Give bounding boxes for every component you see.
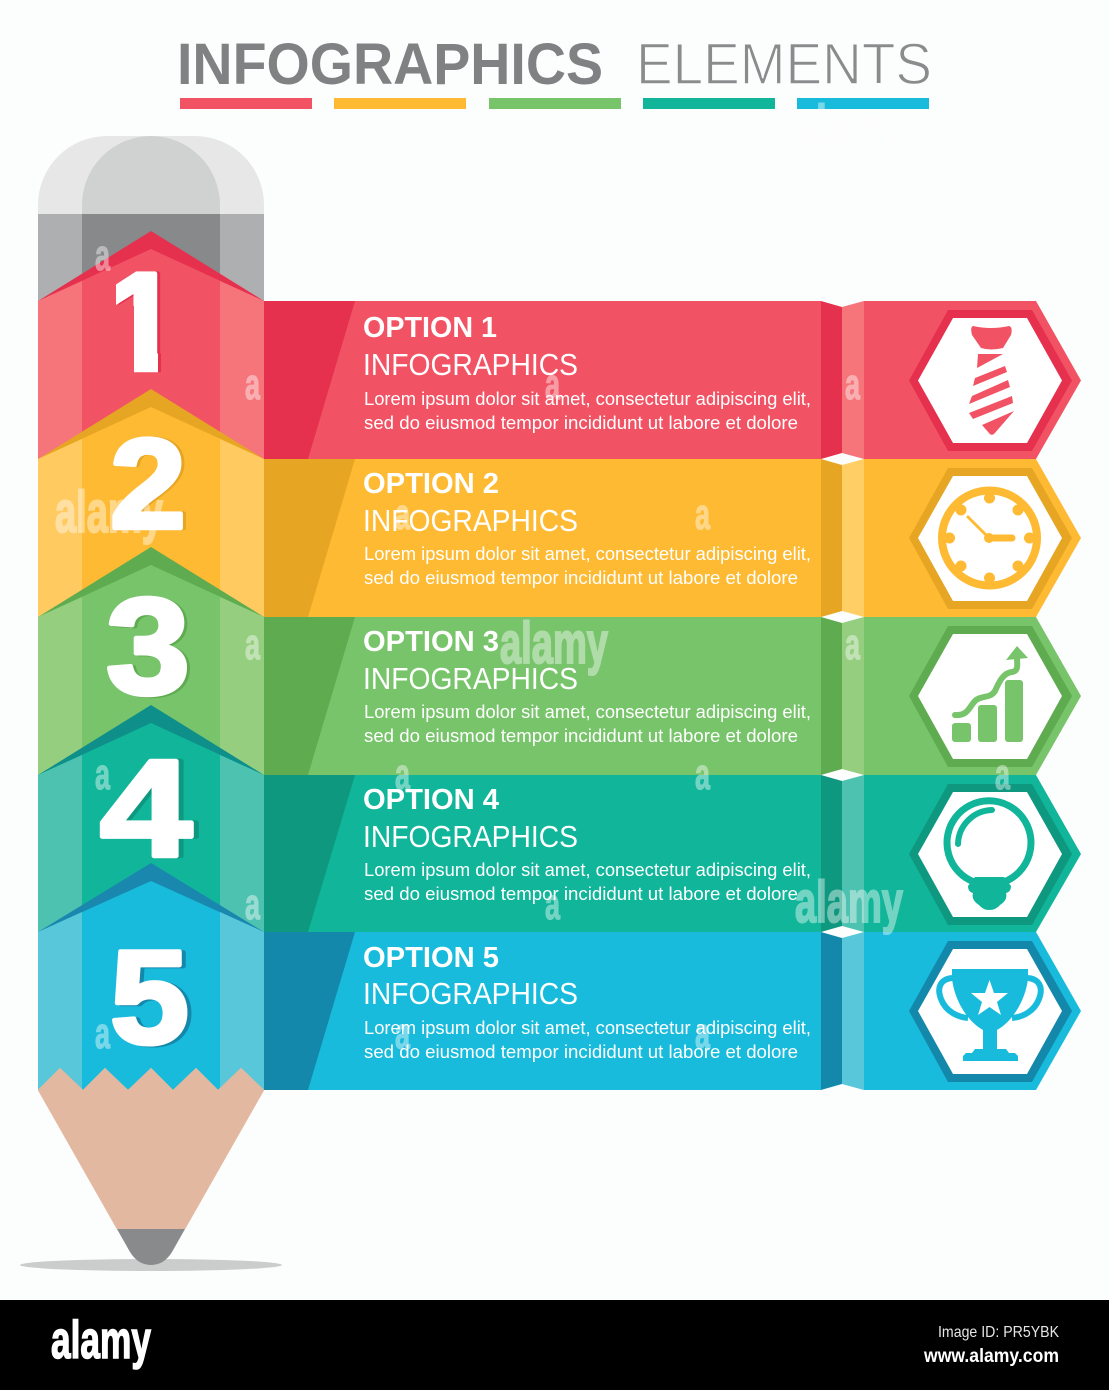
number 1: 1 bbox=[106, 243, 184, 400]
icon: trophy bbox=[939, 969, 1041, 1061]
number 5: 5 bbox=[114, 925, 193, 1073]
number 4: 4 bbox=[105, 732, 197, 886]
pencil section 5 bbox=[38, 863, 264, 1090]
hexagon 1 bbox=[909, 310, 1072, 451]
text: option 5: INFOGRAPHICS bbox=[363, 977, 578, 1011]
watermark: a bbox=[245, 880, 260, 929]
text: option 4: sed do eiusmod tempor incididunt ut labore et dolore bbox=[364, 884, 798, 904]
text: option 1 bbox=[363, 312, 811, 433]
number 3: 3 bbox=[109, 572, 193, 724]
pencil shadow bbox=[20, 1259, 282, 1271]
number 1: 1 bbox=[103, 243, 181, 400]
text: option 3 bbox=[363, 626, 811, 746]
watermark: a bbox=[95, 231, 110, 280]
watermark: a bbox=[395, 1009, 410, 1058]
text: option 1: OPTION 1 bbox=[363, 312, 497, 344]
watermark: a bbox=[695, 1009, 710, 1058]
title colour bars bbox=[180, 98, 929, 109]
band 4 bbox=[264, 775, 1081, 932]
watermark: a bbox=[395, 750, 410, 799]
pencil section 3 bbox=[38, 547, 264, 775]
hexagon 2 bbox=[909, 468, 1072, 609]
pencil wood tip bbox=[38, 1068, 264, 1229]
footer bar: alamy bbox=[51, 1311, 151, 1370]
band 3 bbox=[264, 617, 1081, 775]
watermark: alamy bbox=[55, 480, 163, 545]
hexagon 4 bbox=[909, 784, 1072, 925]
watermark: a bbox=[95, 1009, 110, 1058]
pencil graphite point bbox=[117, 1229, 185, 1265]
band 2 bbox=[264, 459, 1081, 617]
watermark: a bbox=[395, 490, 410, 539]
footer bar: www.alamy.com bbox=[923, 1346, 1059, 1367]
icon: growth chart bbox=[952, 646, 1028, 742]
text: option 2: sed do eiusmod tempor incididunt ut labore et dolore bbox=[364, 568, 798, 588]
text: option 2: OPTION 2 bbox=[363, 468, 499, 500]
watermark: a bbox=[545, 880, 560, 929]
text: option 3: OPTION 3 bbox=[363, 626, 499, 658]
band 5 bbox=[264, 932, 1081, 1090]
number 2: 2 bbox=[110, 413, 186, 556]
number 4: 4 bbox=[100, 732, 192, 886]
icon: clock bbox=[942, 490, 1037, 586]
text: option 2: INFOGRAPHICS bbox=[363, 504, 578, 538]
text: option 4: INFOGRAPHICS bbox=[363, 820, 578, 854]
text: option 5: Lorem ipsum dolor sit amet, consectetur adipiscing elit, bbox=[364, 1018, 811, 1038]
text: option 5 bbox=[363, 942, 811, 1062]
text: option 2: Lorem ipsum dolor sit amet, consectetur adipiscing elit, bbox=[364, 544, 811, 564]
number 2: 2 bbox=[113, 413, 189, 556]
text: option 4: Lorem ipsum dolor sit amet, consectetur adipiscing elit, bbox=[364, 860, 811, 880]
fold notches bbox=[821, 301, 864, 1090]
text: option 1: Lorem ipsum dolor sit amet, consectetur adipiscing elit, bbox=[364, 389, 811, 409]
pencil ferrule bbox=[38, 214, 264, 302]
text: option 5: OPTION 5 bbox=[363, 942, 499, 974]
title: ELEMENTS bbox=[636, 32, 932, 97]
icon: light bulb bbox=[947, 801, 1031, 910]
icon: necktie bbox=[969, 326, 1014, 435]
pencil section 4 bbox=[38, 705, 264, 932]
watermark: a bbox=[995, 750, 1010, 799]
footer bar: Image ID: PR5YBK bbox=[938, 1324, 1059, 1341]
watermark: alamy bbox=[795, 94, 903, 159]
text: option 4: OPTION 4 bbox=[363, 784, 499, 816]
title bbox=[177, 32, 932, 97]
watermark: a bbox=[245, 620, 260, 669]
hexagon 5 bbox=[909, 941, 1072, 1082]
text: option 3: sed do eiusmod tempor incididunt ut labore et dolore bbox=[364, 726, 798, 746]
band 1 bbox=[264, 301, 1081, 459]
watermark: a bbox=[545, 360, 560, 409]
text: option 2 bbox=[363, 468, 811, 588]
watermark: alamy bbox=[500, 611, 608, 676]
text: option 5: sed do eiusmod tempor incididunt ut labore et dolore bbox=[364, 1042, 798, 1062]
pencil section 2 bbox=[38, 389, 264, 617]
pencil section 1 bbox=[38, 231, 264, 459]
watermark: a bbox=[95, 750, 110, 799]
text: option 4 bbox=[363, 784, 811, 904]
watermark: a bbox=[845, 360, 860, 409]
watermark: a bbox=[695, 750, 710, 799]
text: option 1: sed do eiusmod tempor incididunt ut labore et dolore bbox=[364, 413, 798, 433]
text: option 3: INFOGRAPHICS bbox=[363, 662, 578, 696]
number 3: 3 bbox=[106, 570, 190, 724]
title: INFOGRAPHICS bbox=[177, 32, 603, 97]
pencil eraser bbox=[38, 136, 264, 214]
number 5: 5 bbox=[110, 924, 189, 1072]
watermark: a bbox=[695, 490, 710, 539]
hexagon 3 bbox=[909, 626, 1072, 767]
text: option 3: Lorem ipsum dolor sit amet, consectetur adipiscing elit, bbox=[364, 702, 811, 722]
text: option 1: INFOGRAPHICS bbox=[363, 348, 578, 382]
footer bar bbox=[0, 1300, 1109, 1390]
watermark: alamy bbox=[795, 870, 903, 935]
watermark: a bbox=[845, 620, 860, 669]
watermark bbox=[55, 94, 1010, 1058]
watermark: a bbox=[245, 360, 260, 409]
number 1 bbox=[116, 271, 161, 372]
